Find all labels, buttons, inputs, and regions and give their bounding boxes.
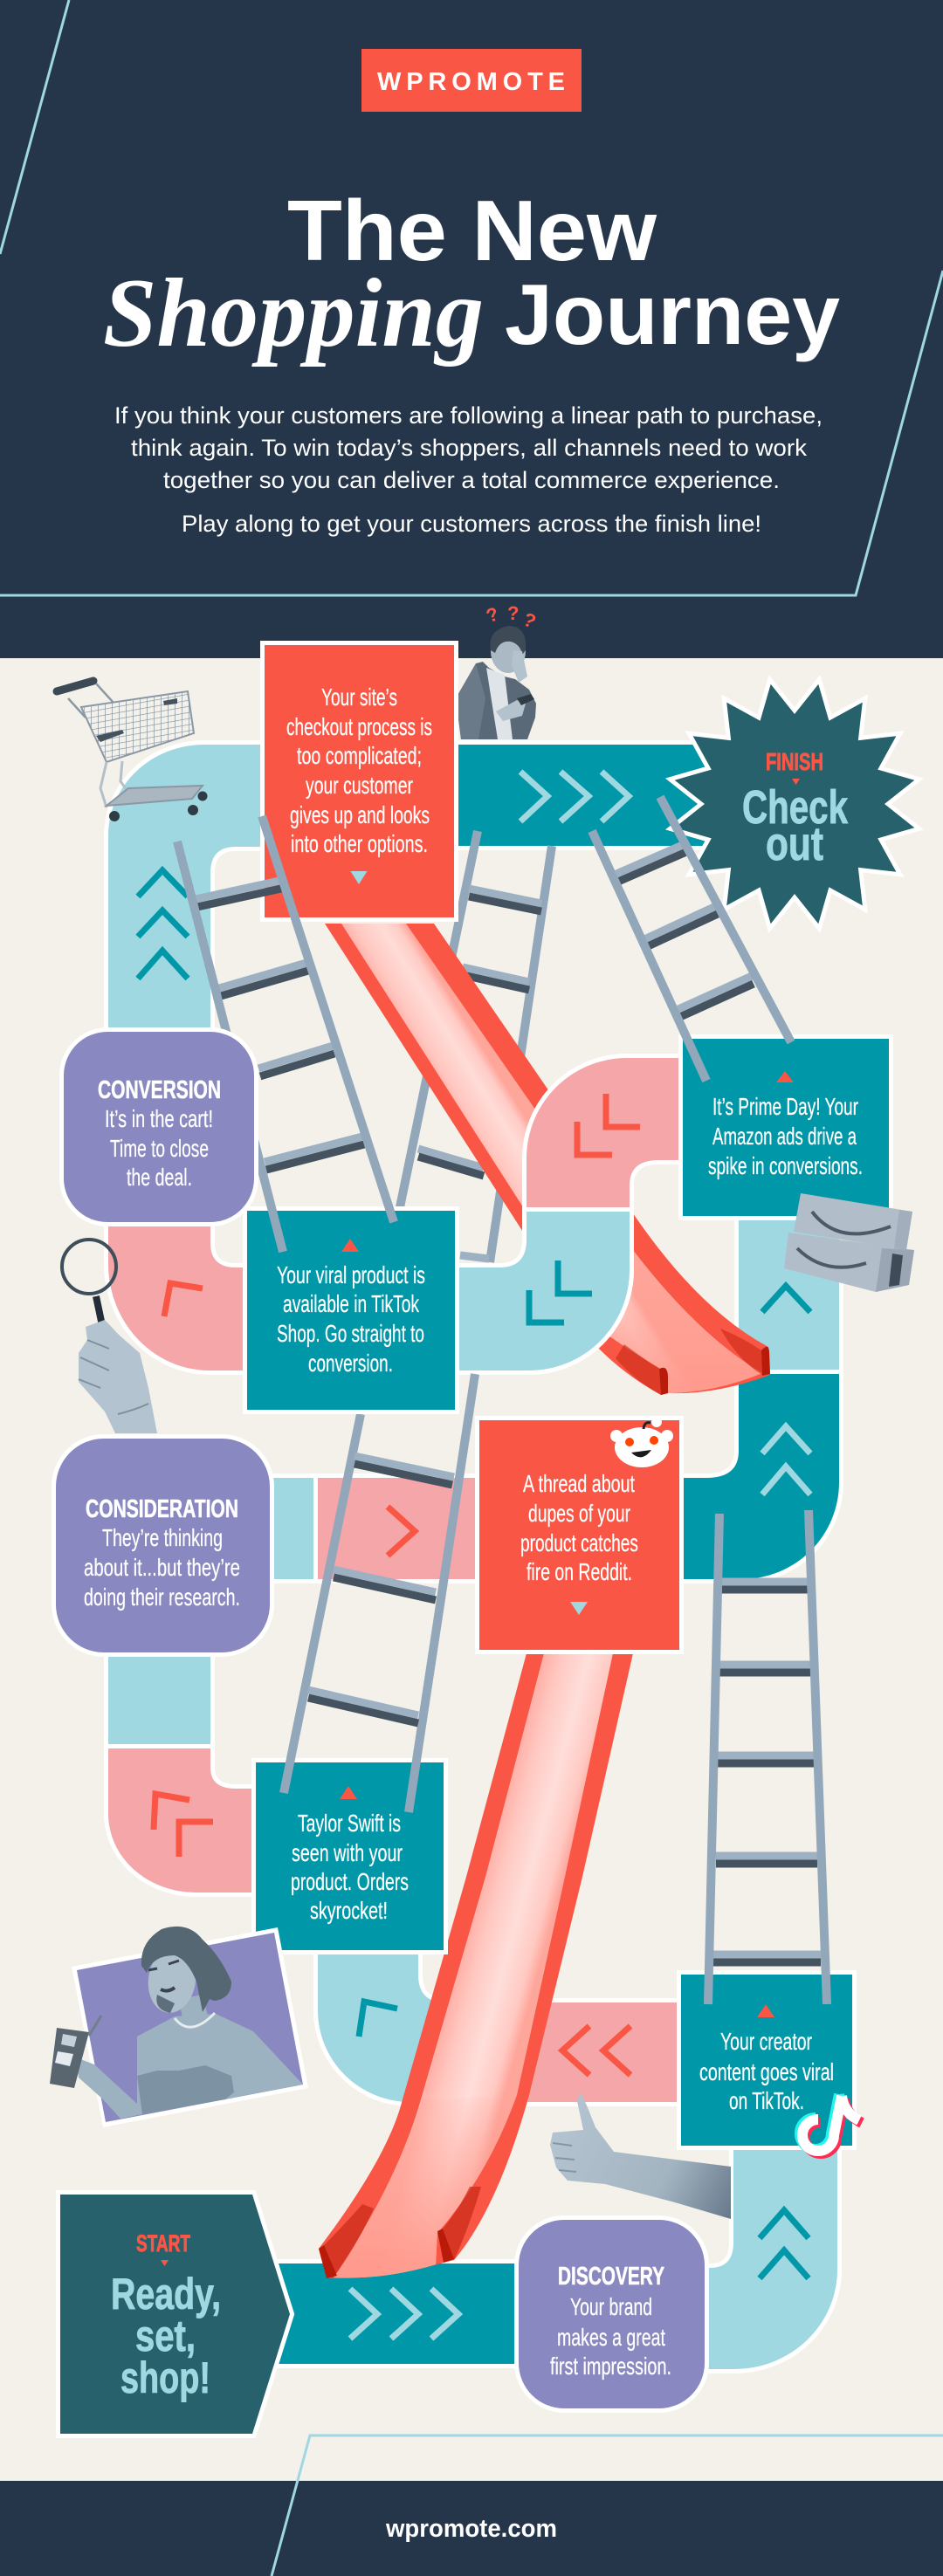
box: reddit thread: dupes of your — [528, 1500, 630, 1527]
box: reddit thread: product catches — [520, 1529, 638, 1556]
track: pink strip — [489, 2002, 678, 2102]
blob: discovery — [519, 2220, 705, 2408]
icon: shopping cart — [57, 681, 208, 821]
box: checkout complicated: too complicated; — [297, 742, 422, 769]
illustration: confused man with phone: ? — [483, 602, 501, 627]
box: viral product — [247, 1211, 455, 1410]
box: checkout complicated: into other options. — [291, 830, 428, 857]
footer — [0, 2435, 943, 2576]
intro text: think again. To win today’s shoppers, all channels need to work — [131, 435, 808, 461]
box: taylor swift: product. Orders — [291, 1868, 409, 1895]
box: checkout complicated: checkout process is — [286, 713, 432, 740]
chevron — [164, 1283, 203, 1316]
start pentagon — [60, 2195, 290, 2434]
box: viral product: Shop. Go straight to — [277, 1320, 424, 1347]
track: right teal curve — [681, 1374, 839, 1579]
box: reddit thread — [479, 1417, 679, 1650]
start pentagon: set, — [135, 2312, 196, 2360]
ladder: middle behind slide — [400, 831, 552, 1262]
hair — [141, 1927, 231, 2012]
track: pink lower left curve — [108, 1748, 253, 1893]
box: viral product: Your viral product is — [277, 1261, 425, 1288]
blob: conversion: It’s in the cart! — [105, 1105, 213, 1132]
intro text: Play along to get your customers across the finish line! — [182, 511, 761, 537]
box: reddit thread: A thread about — [523, 1470, 635, 1497]
box: taylor swift: skyrocket! — [310, 1897, 388, 1924]
track: right lower curve — [707, 2149, 837, 2369]
track: top teal — [454, 745, 716, 846]
illustration: confused man with phone: ? — [507, 602, 519, 624]
illustration: confused man with phone: ? — [520, 608, 539, 633]
panel: header — [0, 0, 943, 658]
icon: amazon boxes — [784, 1193, 914, 1292]
box: creator content — [681, 1975, 852, 2146]
icon: reddit — [610, 1417, 673, 1467]
box: viral product: available in TikTok — [283, 1290, 420, 1317]
box: creator content: Your creator — [720, 2028, 812, 2055]
icon: tiktok — [800, 2094, 862, 2154]
ladder: top left — [177, 816, 394, 1252]
illustration: confused man with phone — [456, 602, 539, 739]
blob: consideration: doing their research. — [84, 1583, 240, 1611]
logo: wpromote — [361, 49, 582, 112]
box: taylor swift: Taylor Swift is — [298, 1810, 401, 1837]
track: blue and pink row — [273, 1478, 475, 1579]
ladder: top right — [592, 797, 791, 1081]
chevron right — [388, 1507, 415, 1556]
box: checkout complicated — [265, 645, 454, 917]
chevrons left — [562, 2026, 630, 2075]
chevrons right — [350, 2289, 458, 2339]
box: prime day: It’s Prime Day! Your — [712, 1093, 858, 1120]
box: creator content: on TikTok. — [729, 2087, 804, 2114]
chevrons right — [520, 772, 629, 821]
ladder: right — [708, 1510, 827, 2004]
box: creator content: content goes viral — [699, 2058, 834, 2085]
track: right blue square — [739, 1220, 839, 1370]
title — [103, 182, 840, 368]
chevrons up — [138, 870, 188, 979]
track: blue below consideration — [108, 1657, 210, 1746]
slide: checkout to viral — [325, 924, 770, 1395]
box: taylor swift — [256, 1762, 444, 1950]
illustration: taylor swift photo — [50, 1927, 308, 2127]
box: prime day: Amazon ads drive a — [712, 1123, 857, 1150]
title: Shopping — [103, 259, 484, 368]
illustration: thumbs up — [550, 2092, 731, 2219]
illustration: hand with magnifier — [62, 1240, 157, 1433]
finish star: FINISH — [766, 748, 823, 775]
footer: wpromote.com — [385, 2515, 557, 2543]
box: checkout complicated: your customer — [306, 772, 413, 799]
chevron — [359, 2002, 397, 2037]
track: top left curve — [108, 745, 262, 1030]
box: reddit thread: fire on Reddit. — [527, 1558, 632, 1585]
title: Journey — [505, 266, 840, 362]
blob: consideration: about it...but they’re — [84, 1554, 240, 1581]
blob: consideration: They’re thinking — [102, 1524, 223, 1551]
track: blue middle curve — [458, 1212, 630, 1370]
chevrons — [577, 1094, 640, 1155]
start pentagon: shop! — [120, 2353, 210, 2402]
finish star — [675, 684, 914, 924]
track: blue lower curve — [318, 1954, 489, 2102]
box: checkout complicated: Your site’s — [321, 683, 397, 711]
slide: reddit to start — [319, 1653, 633, 2278]
cup — [50, 2028, 89, 2088]
box: checkout complicated: gives up and looks — [290, 801, 430, 828]
logo: wpromote: WPROMOTE — [377, 68, 565, 96]
blob: discovery: first impression. — [550, 2353, 671, 2380]
track: pink below conversion — [108, 1222, 249, 1370]
blob: consideration: CONSIDERATION — [86, 1495, 238, 1523]
intro text — [114, 402, 823, 537]
box: prime day: spike in conversions. — [708, 1152, 863, 1179]
blob: conversion: the deal. — [127, 1164, 192, 1191]
chevron up — [762, 1286, 810, 1312]
start pentagon: START — [136, 2230, 190, 2257]
blob: discovery: Your brand — [570, 2293, 652, 2320]
blob: discovery: makes a great — [557, 2324, 665, 2351]
finish star: out — [766, 818, 823, 870]
box: viral product: conversion. — [308, 1350, 393, 1377]
track: pink middle curve — [527, 1058, 681, 1208]
chevrons — [154, 1794, 213, 1857]
chevrons — [529, 1261, 592, 1322]
start pentagon: Ready, — [111, 2270, 221, 2318]
blob: consideration — [56, 1439, 270, 1652]
blob: discovery: DISCOVERY — [558, 2263, 664, 2291]
finish star: Check — [742, 781, 849, 834]
blob: conversion — [64, 1032, 254, 1222]
chevrons up — [760, 2210, 809, 2278]
track: start teal — [275, 2263, 515, 2364]
blob: conversion: CONVERSION — [98, 1076, 221, 1104]
chevrons up — [762, 1426, 810, 1494]
box: prime day — [683, 1039, 889, 1216]
box: taylor swift: seen with your — [292, 1839, 403, 1866]
title: The New — [287, 182, 657, 278]
ladder: center left — [284, 1374, 475, 1812]
arm and body — [76, 2014, 303, 2119]
blob: conversion: Time to close — [110, 1135, 209, 1162]
intro text: together so you can deliver a total commerce experience. — [163, 467, 780, 493]
intro text: If you think your customers are following a linear path to purchase, — [114, 402, 823, 429]
